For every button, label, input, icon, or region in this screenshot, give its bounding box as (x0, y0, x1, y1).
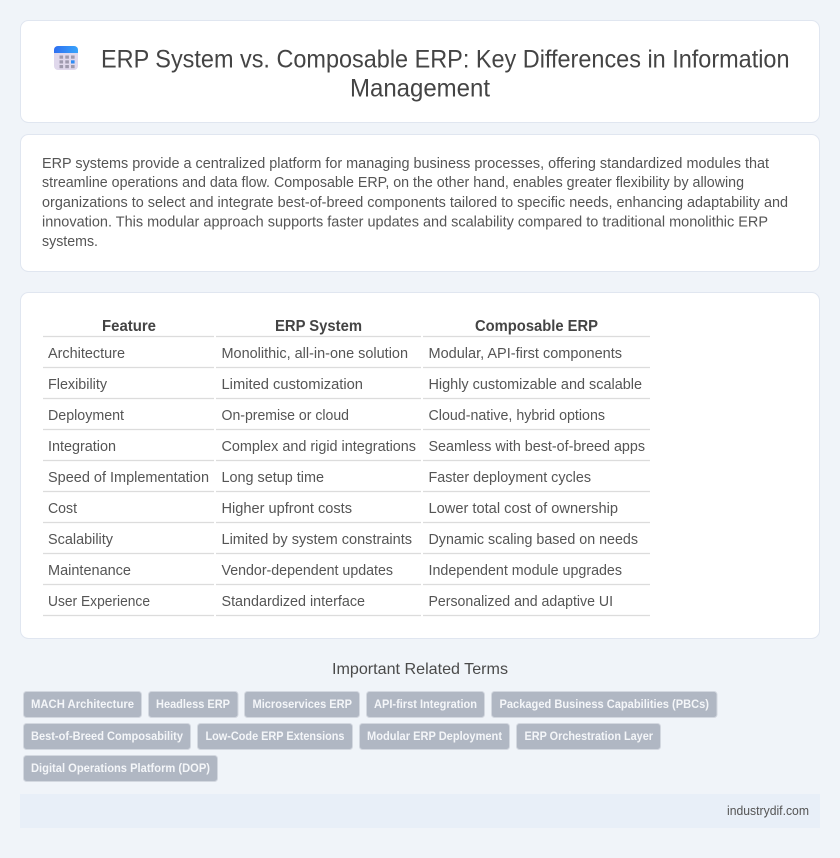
table row: User Experience: Personalized and adaptive UI (428, 594, 613, 610)
table row: Integration: Integration (48, 439, 116, 455)
table header: Composable ERP (475, 318, 598, 335)
tag: ERP Orchestration Layer: ERP Orchestration Layer (524, 729, 653, 743)
table row: Flexibility (43, 377, 650, 398)
tag: MACH Architecture: MACH Architecture (31, 697, 134, 711)
tag: Digital Operations Platform: Digital Operations Platform (DOP) (31, 761, 210, 775)
tag: API-first Integration: API-first Integration (374, 697, 477, 711)
table row: Scalability: Limited by system constraints (222, 532, 412, 548)
text block: intro paragraph: systems. (42, 234, 98, 250)
heading: related terms: Important Related Terms (332, 661, 508, 678)
panel: comparison table (20, 292, 820, 638)
table row: Maintenance: Vendor-dependent updates (222, 563, 393, 579)
table row: Cost: Cost (48, 501, 77, 517)
footer: industrydif.com (727, 804, 809, 818)
title: Management (350, 74, 490, 102)
table row: Scalability: Scalability (48, 532, 114, 548)
tag: Modular ERP Deployment: Modular ERP Deployment (367, 729, 502, 743)
tag: Modular ERP Deployment (360, 724, 510, 750)
table row: Integration: Complex and rigid integrations (222, 439, 416, 455)
tag: API-first Integration (366, 692, 484, 718)
table row: Flexibility: Limited customization (222, 377, 363, 393)
table row: Architecture (43, 346, 650, 368)
table row: Flexibility: Flexibility (48, 377, 108, 393)
table row: Cost: Higher upfront costs (222, 501, 352, 517)
table header: ERP System (275, 318, 362, 335)
table row: User Experience: Standardized interface (222, 594, 365, 610)
tag: Headless ERP: Headless ERP (156, 697, 230, 711)
footer (20, 794, 820, 828)
table row: Scalability: Dynamic scaling based on needs (428, 532, 638, 548)
table row: Deployment (43, 408, 650, 430)
table row: Speed of Implementation: Faster deployment cycles (428, 470, 591, 486)
icon: calendar (54, 46, 78, 70)
text block: intro paragraph: innovation. This modular approach supports faster updates and scalability compared to traditional monolithic ERP (42, 214, 768, 230)
panel: intro text (20, 134, 820, 272)
table row: User Experience (43, 594, 650, 616)
tag: Packaged Business Capabilities: Packaged Business Capabilities (PBCs) (500, 697, 709, 711)
panel: header (20, 20, 820, 122)
text block: intro paragraph: ERP systems provide a centralized platform for managing business processes, offering standardized modules that (42, 156, 769, 172)
table row: Architecture: Monolithic, all-in-one solution (222, 346, 408, 362)
tag: Low-Code ERP Extensions (198, 724, 352, 750)
table row: Architecture: Architecture (48, 346, 125, 362)
text block: intro paragraph: streamline operations and data flow. Composable ERP, on the other hand, enables greater flexibility by allowing (42, 175, 744, 191)
tag: Microservices ERP: Microservices ERP (252, 697, 352, 711)
table row: Scalability (43, 532, 650, 554)
tag: ERP Orchestration Layer (516, 724, 660, 750)
tag group: related terms (24, 692, 717, 782)
table row: Integration (43, 439, 650, 460)
tag: MACH Architecture (24, 692, 142, 718)
table row: Speed of Implementation: Speed of Implementation (48, 470, 209, 486)
table header (43, 318, 650, 336)
table row: Speed of Implementation: Long setup time (222, 470, 324, 486)
tag: Digital Operations Platform (24, 756, 218, 782)
tag: Best-of-Breed Composability (24, 724, 190, 750)
table row: Deployment: On-premise or cloud (222, 408, 349, 424)
table row: Integration: Seamless with best-of-breed apps (428, 439, 645, 455)
table header: Feature (102, 318, 156, 335)
text block: intro paragraph (42, 156, 788, 250)
table row: User Experience: User Experience (48, 594, 150, 610)
title (101, 46, 790, 102)
text block: intro paragraph: organizations to select and integrate best-of-breed components tailored to specific needs, enhancing adaptability and (42, 195, 788, 211)
tag: Best-of-Breed Composability: Best-of-Breed Composability (31, 729, 183, 743)
table row: Deployment: Deployment (48, 408, 124, 424)
tag: Microservices ERP (244, 692, 360, 718)
table row: Cost: Lower total cost of ownership (428, 501, 618, 517)
table row: Flexibility: Highly customizable and scalable (428, 377, 642, 393)
tag: Low-Code ERP Extensions: Low-Code ERP Extensions (206, 729, 345, 743)
table row: Deployment: Cloud-native, hybrid options (428, 408, 605, 424)
table row: Cost (43, 501, 650, 522)
table row: Maintenance (43, 563, 650, 584)
table row: Maintenance: Maintenance (48, 563, 131, 579)
table row: Speed of Implementation (43, 470, 650, 492)
title: ERP System vs. Composable ERP: Key Differences in Information (101, 46, 790, 74)
table row: Architecture: Modular, API-first components (428, 346, 622, 362)
table row: Maintenance: Independent module upgrades (428, 563, 622, 579)
tag: Packaged Business Capabilities (492, 692, 717, 718)
tag: Headless ERP (148, 692, 238, 718)
